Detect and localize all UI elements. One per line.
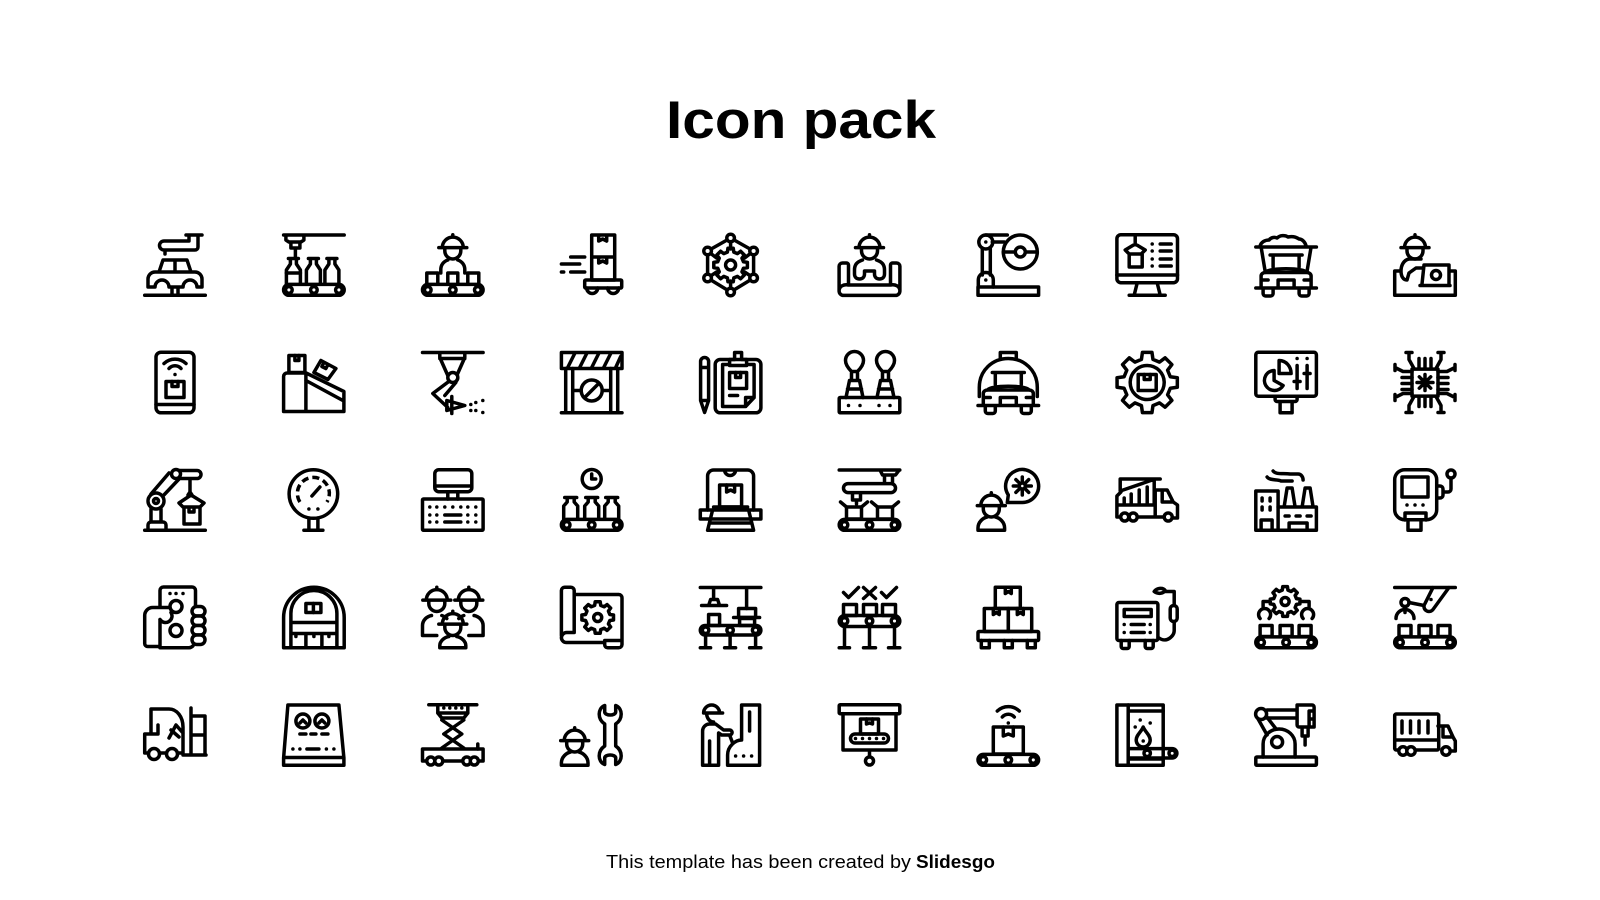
- icon: scissor lift: [422, 705, 483, 765]
- icon: microchip: [1395, 352, 1455, 412]
- title: Icon pack: [666, 91, 937, 150]
- icon: hand holding remote: [145, 587, 205, 648]
- icon: worker and wrench: [561, 706, 621, 765]
- icon: gear blueprint: [561, 587, 622, 648]
- icon: welding machine: [1117, 588, 1177, 648]
- icon: barrier gate: [561, 352, 622, 413]
- icon: gear network: [704, 234, 757, 296]
- icon: dashboard billboard: [1256, 352, 1316, 413]
- icon: worker at conveyor: [422, 235, 483, 295]
- icon: robot arm lifting box: [145, 470, 205, 530]
- icon: forklift: [145, 708, 206, 760]
- icon: quality check conveyor: [839, 588, 900, 648]
- icon: spray robot arm: [422, 352, 483, 414]
- icon: worker with idea bubble: [977, 470, 1039, 530]
- icon: gear with box: [1117, 352, 1177, 413]
- icon: car on robot assembly line: [145, 235, 205, 295]
- icon: smart box on conveyor: [978, 707, 1039, 765]
- icon: truck in dome: [978, 352, 1039, 414]
- icon: packing robot on conveyor: [839, 470, 900, 530]
- icon: mining truck front: [1256, 236, 1316, 296]
- icon: team of workers: [422, 587, 483, 648]
- icon: robotic drill: [1256, 705, 1316, 765]
- footer credit: Slidesgo: [916, 851, 995, 872]
- icon: warehouse: [284, 587, 344, 648]
- icon: delivery cart with boxes: [561, 235, 622, 294]
- icon: smartphone with wifi box: [156, 352, 194, 413]
- icon: presentation screen with conveyor: [839, 705, 900, 765]
- icon: worker operating machine: [703, 705, 760, 765]
- icon: factory: [1256, 471, 1316, 530]
- icon: pressure gauge: [289, 470, 338, 530]
- icon: clipboard and pencil: [701, 352, 761, 413]
- icon: dump truck: [1117, 479, 1178, 521]
- icon: overhead arm over conveyor: [1395, 588, 1455, 648]
- icon: worker with laptop: [1395, 235, 1455, 295]
- icon: monitor with warehouse list: [1117, 235, 1178, 295]
- icon: container truck: [1395, 714, 1455, 755]
- icon: gear arms over conveyor: [1256, 587, 1316, 648]
- icon: boxes on ramp: [284, 356, 344, 412]
- footer credit: This template has been created by: [606, 851, 912, 872]
- icon: control joysticks: [839, 352, 900, 413]
- icon: boxes on pallet: [978, 587, 1039, 648]
- icon: stamping line: [700, 588, 761, 648]
- icon: bottle filling conveyor: [284, 235, 344, 295]
- icon: hydraulic press: [700, 470, 761, 530]
- icon: computer keyboard station: [422, 470, 483, 530]
- icon: robotic saw: [978, 235, 1039, 295]
- icon: control panel: [284, 705, 344, 765]
- icon: control machine with lever: [1395, 470, 1455, 530]
- icon: timed bottle conveyor: [561, 470, 622, 530]
- icon grid: [145, 234, 1455, 765]
- icon: furnace with conveyor: [1117, 705, 1177, 765]
- icon: worker with blueprint tray: [839, 235, 900, 295]
